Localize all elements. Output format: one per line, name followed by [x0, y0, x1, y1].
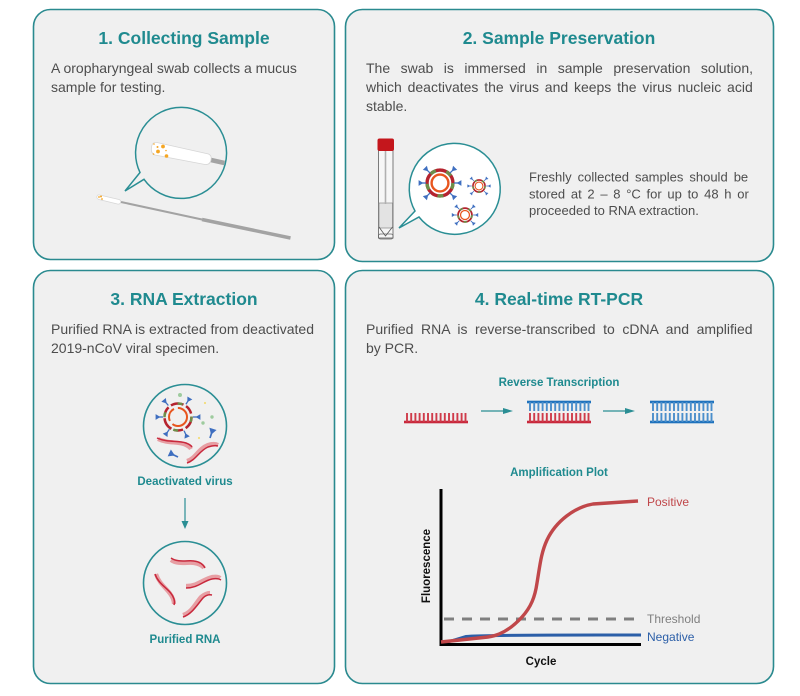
- text: step 4 description: Purified RNA is reverse-transcribed to cDNA and amplified: [366, 321, 753, 337]
- icon: large virus: [419, 167, 461, 199]
- heading: step 4: 4. Real-time RT-PCR: [475, 289, 643, 309]
- arrow: down to purified RNA: [182, 498, 188, 529]
- icon: medium virus: [452, 205, 478, 225]
- panel: collecting sample: [34, 10, 334, 260]
- text: step 3 description: 2019-nCoV viral specimen.: [51, 340, 219, 356]
- icon: RNA strand: [404, 413, 468, 423]
- panel: sample preservation: [346, 10, 774, 262]
- heading: step 2: 2. Sample Preservation: [463, 28, 655, 48]
- legend: negative: Negative: [647, 630, 695, 644]
- chart: amplification plot: [421, 489, 700, 668]
- callout: swab tip magnified: [125, 107, 227, 198]
- arrow: hybrid to cDNA: [603, 408, 635, 414]
- icon: small virus: [468, 177, 490, 195]
- heading: reverse transcription: Reverse Transcription: [499, 377, 619, 389]
- label: deactivated virus: Deactivated virus: [137, 476, 233, 488]
- heading: step 3: 3. RNA Extraction: [110, 289, 258, 309]
- icon: swab: [97, 195, 290, 238]
- panel: real-time RT-PCR: [346, 270, 774, 684]
- text: step 2 description: stable.: [366, 98, 407, 114]
- axis label: cycle: Cycle: [526, 656, 556, 668]
- text: step 2 description: The swab is immersed in sample preservation solution,: [366, 60, 753, 76]
- icon: sample tube: [378, 138, 394, 239]
- callout: virus in solution: [399, 143, 500, 234]
- axis label: fluorescence: Fluorescence: [421, 529, 433, 603]
- icon: cDNA double strand: [650, 401, 714, 423]
- text: storage note: proceeded to RNA extraction.: [529, 203, 699, 218]
- text: step 4 description: by PCR.: [366, 340, 418, 356]
- text: storage note: stored at 2 – 8 °C for up to 48 h or: [529, 186, 749, 202]
- panel: RNA extraction: [34, 270, 334, 684]
- text: step 1 description: A oropharyngeal swab collects a mucus: [51, 60, 297, 76]
- text: step 1 description: sample for testing.: [51, 79, 165, 95]
- label: purified RNA: Purified RNA: [150, 634, 220, 646]
- diagram: reverse transcription: [404, 401, 714, 423]
- heading: amplification plot: Amplification Plot: [510, 467, 608, 479]
- legend: threshold: Threshold: [647, 612, 700, 626]
- legend: positive: Positive: [647, 495, 689, 509]
- text: step 2 description: which deactivates the virus and keeps the virus nucleic acid: [365, 79, 753, 95]
- arrow: RNA to hybrid: [481, 408, 513, 414]
- icon: purified RNA circle: [144, 542, 226, 624]
- icon: RNA-cDNA hybrid: [527, 401, 591, 423]
- text: step 3 description: Purified RNA is extracted from deactivated: [51, 321, 314, 337]
- text: storage note: Freshly collected samples should be: [529, 170, 748, 184]
- icon: deactivated virus circle: [144, 384, 226, 468]
- heading: step 1: 1. Collecting Sample: [98, 28, 270, 48]
